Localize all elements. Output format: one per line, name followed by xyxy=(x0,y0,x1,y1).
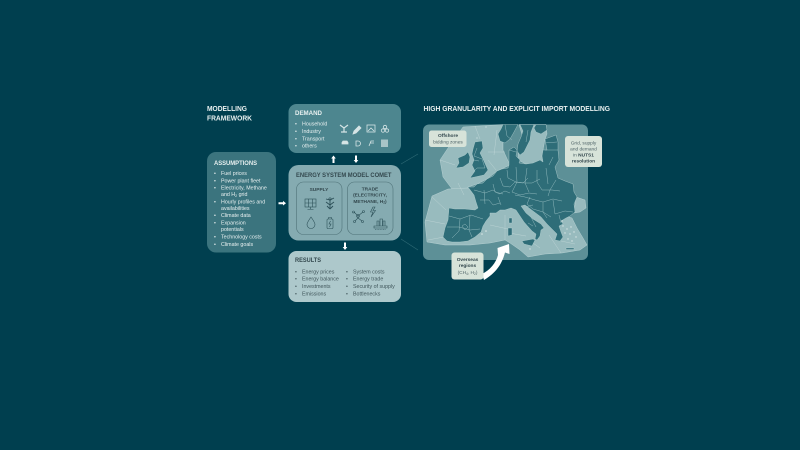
heading: high granularity: HIGH GRANULARITY AND EXPLICIT IMPORT MODELLING xyxy=(424,104,610,113)
panel: europe map xyxy=(423,124,588,260)
callout: overseas regions: 2 xyxy=(474,272,476,276)
demand list: • xyxy=(295,136,297,142)
scandinavia xyxy=(498,124,547,155)
callout: offshore bidding zones: bidding zones xyxy=(433,140,463,146)
results list left xyxy=(295,270,339,298)
icon: battery xyxy=(327,218,333,228)
callout: NUTS1 resolution: Grid, supply xyxy=(571,140,597,146)
panel: demand xyxy=(288,104,401,153)
icon: wind and plant xyxy=(326,198,334,209)
offshore boundaries xyxy=(425,126,575,253)
callout: offshore bidding zones xyxy=(429,130,466,147)
connector lines xyxy=(401,154,418,250)
arrow: model to results xyxy=(343,242,347,250)
demand list: others xyxy=(302,144,317,150)
sub-panel: supply: SUPPLY xyxy=(310,187,329,193)
assumptions list: Climate goals xyxy=(221,242,253,248)
UK and Nordic region borders xyxy=(473,124,528,172)
callout: overseas regions: 4 xyxy=(466,272,468,276)
assumptions list: potentials xyxy=(221,227,244,233)
sub-panel: trade: METHANE, H xyxy=(353,200,383,205)
assumptions list: Expansion xyxy=(221,220,246,226)
assumptions list: 2 xyxy=(235,194,237,198)
demand icons xyxy=(340,125,389,147)
demand list: • xyxy=(295,129,297,135)
results list left: • xyxy=(295,270,297,276)
icon: water drop xyxy=(307,217,315,228)
sub-panel: trade: (ELECTRICITY, xyxy=(353,192,388,198)
sub-panel: trade: ) xyxy=(385,199,387,205)
results list right: Security of supply xyxy=(353,284,395,290)
greek islands xyxy=(476,126,577,250)
assumptions list: • xyxy=(214,186,216,192)
arrow: up to demand xyxy=(331,156,336,163)
demand list: Industry xyxy=(302,129,321,135)
assumptions list: grid xyxy=(237,192,247,198)
comet heading: ENERGY SYSTEM MODEL COMET xyxy=(296,173,392,179)
results list right: • xyxy=(346,284,348,290)
results list right: • xyxy=(346,276,348,282)
demand list: Household xyxy=(302,122,327,128)
panel: energy system model comet xyxy=(288,165,401,240)
heading: modelling framework: FRAMEWORK xyxy=(207,114,253,122)
assumptions list: Power plant fleet xyxy=(221,178,261,184)
assumptions list: Climate data xyxy=(221,213,251,219)
results list left: Investments xyxy=(302,284,331,290)
assumptions list: and H xyxy=(221,192,235,198)
demand list: Transport xyxy=(302,136,325,142)
continental europe xyxy=(443,135,577,242)
results list right: • xyxy=(346,270,348,276)
results list left: • xyxy=(295,276,297,282)
results list left: Energy prices xyxy=(302,270,335,276)
results list right xyxy=(346,270,395,298)
sub-panel: trade: 2 xyxy=(383,201,385,205)
arrow: overseas imports xyxy=(482,244,510,280)
callout: overseas regions: , H xyxy=(468,270,475,276)
panel: results xyxy=(288,251,401,302)
results list right: Energy trade xyxy=(353,276,383,282)
results list left: • xyxy=(295,292,297,298)
icon: solar panel xyxy=(305,199,316,210)
assumptions list: • xyxy=(214,213,216,219)
assumptions list: • xyxy=(214,234,216,240)
demand heading: DEMAND xyxy=(295,111,323,117)
panel: assumptions xyxy=(207,152,276,252)
results list left: • xyxy=(295,284,297,290)
callout: NUTS1 resolution: resolution xyxy=(572,158,595,164)
results list right: • xyxy=(346,292,348,298)
assumptions list: Hourly profiles and xyxy=(221,200,265,206)
arrow: down from demand xyxy=(354,156,358,163)
callout: NUTS1 resolution: in NUTS1 xyxy=(573,152,594,158)
callout: NUTS1 resolution: and demand xyxy=(570,146,597,152)
assumptions list: availabilities xyxy=(221,206,250,212)
heading: modelling framework: MODELLING xyxy=(207,104,247,113)
callout: overseas regions: regions xyxy=(459,263,476,269)
callout: overseas regions: Overseas xyxy=(457,257,479,263)
results list left: Energy balance xyxy=(302,276,339,282)
assumptions heading: ASSUMPTIONS xyxy=(214,160,257,167)
demand list: • xyxy=(295,144,297,150)
assumptions list: • xyxy=(214,171,216,177)
nuts boundaries xyxy=(447,142,573,238)
icon: lightning xyxy=(370,207,376,217)
assumptions list: Fuel prices xyxy=(221,171,247,177)
icon: ship xyxy=(374,219,387,230)
icon: network xyxy=(352,210,364,222)
assumptions list: • xyxy=(214,200,216,206)
ireland xyxy=(456,152,470,168)
callout: NUTS1 resolution xyxy=(565,136,602,167)
assumptions list: Technology costs xyxy=(221,234,262,240)
callout: overseas regions xyxy=(452,252,484,280)
arrow: assumptions to model xyxy=(278,201,286,206)
demand list xyxy=(295,122,327,150)
assumptions list xyxy=(214,171,267,248)
sub-panel: trade xyxy=(348,182,393,234)
islands xyxy=(508,218,574,250)
results list right: System costs xyxy=(353,270,385,276)
offshore zones xyxy=(425,124,587,257)
results list right: Bottlenecks xyxy=(353,292,381,298)
assumptions list: Electricity, Methane xyxy=(221,186,267,192)
callout: overseas regions: (CH xyxy=(458,271,466,276)
callout: offshore bidding zones: Offshore xyxy=(438,133,458,139)
heading: modelling framework xyxy=(207,104,253,122)
results heading: RESULTS xyxy=(295,258,321,264)
callout: overseas regions: ) xyxy=(476,270,478,276)
assumptions list: • xyxy=(214,220,216,226)
assumptions list: • xyxy=(214,178,216,184)
results list left: Emissions xyxy=(302,292,326,298)
sub-panel: trade: TRADE xyxy=(362,186,379,192)
demand list: • xyxy=(295,122,297,128)
great britain xyxy=(470,141,488,178)
assumptions list: • xyxy=(214,242,216,248)
